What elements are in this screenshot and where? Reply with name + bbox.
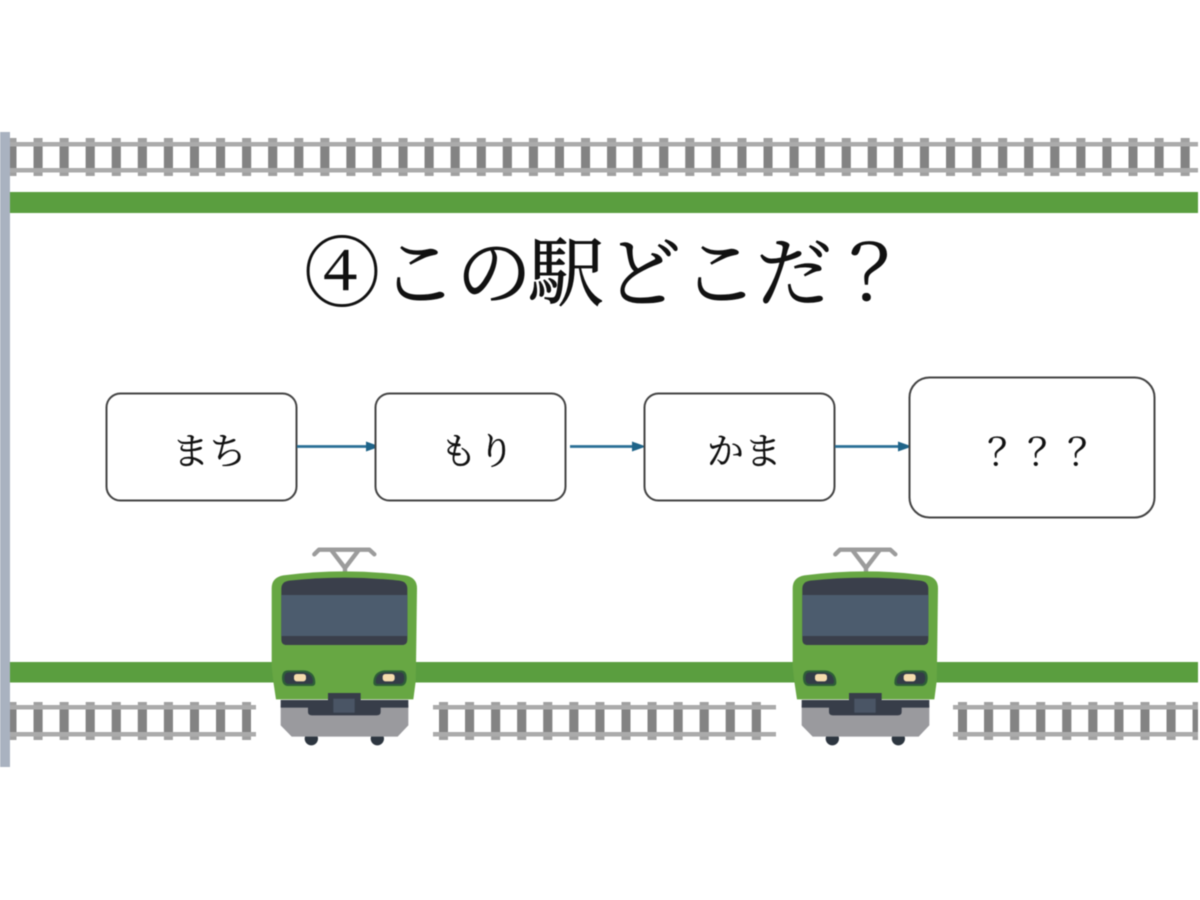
train body: [793, 571, 938, 699]
bottom railway track: left segment: [8, 705, 256, 736]
coupler and bumper: [281, 693, 408, 715]
flow box: もり: もり: [440, 432, 515, 473]
flow box: まち: まち: [172, 432, 247, 473]
left headlight: [282, 670, 315, 686]
train: left: [272, 550, 417, 745]
train skirt: [802, 705, 929, 737]
flow box: まち: [106, 394, 296, 500]
arrow: まち to もり: [297, 442, 380, 452]
arrow: かま to ？？？: [835, 442, 912, 452]
pantograph: [314, 550, 374, 573]
top green platform band: [10, 192, 1198, 213]
flow box: かま: [644, 394, 834, 500]
flow box: unknown station: ？？？: [979, 433, 1099, 474]
windscreen: [802, 578, 928, 645]
arrow: もり to かま: [570, 442, 646, 452]
train body: [272, 571, 417, 699]
train skirt: [281, 705, 408, 737]
top railway track: [8, 142, 1198, 172]
right headlight: [894, 670, 928, 686]
flow box: かま: かま: [707, 432, 782, 473]
wheels: [826, 732, 905, 745]
train: right: [793, 550, 938, 745]
right headlight: [373, 670, 407, 686]
left grey pillar: [0, 132, 10, 767]
title: ④この駅どこだ？: [304, 233, 908, 317]
pantograph: [835, 550, 895, 573]
left headlight: [803, 670, 836, 686]
coupler and bumper: [802, 693, 929, 715]
bottom railway track: middle segment: [433, 705, 776, 736]
flow box: unknown station: [910, 378, 1154, 518]
flow box: もり: [376, 394, 566, 500]
bottom railway track: right segment: [953, 705, 1198, 736]
bottom green platform band: [10, 662, 1198, 682]
wheels: [305, 732, 384, 745]
windscreen: [281, 578, 407, 645]
